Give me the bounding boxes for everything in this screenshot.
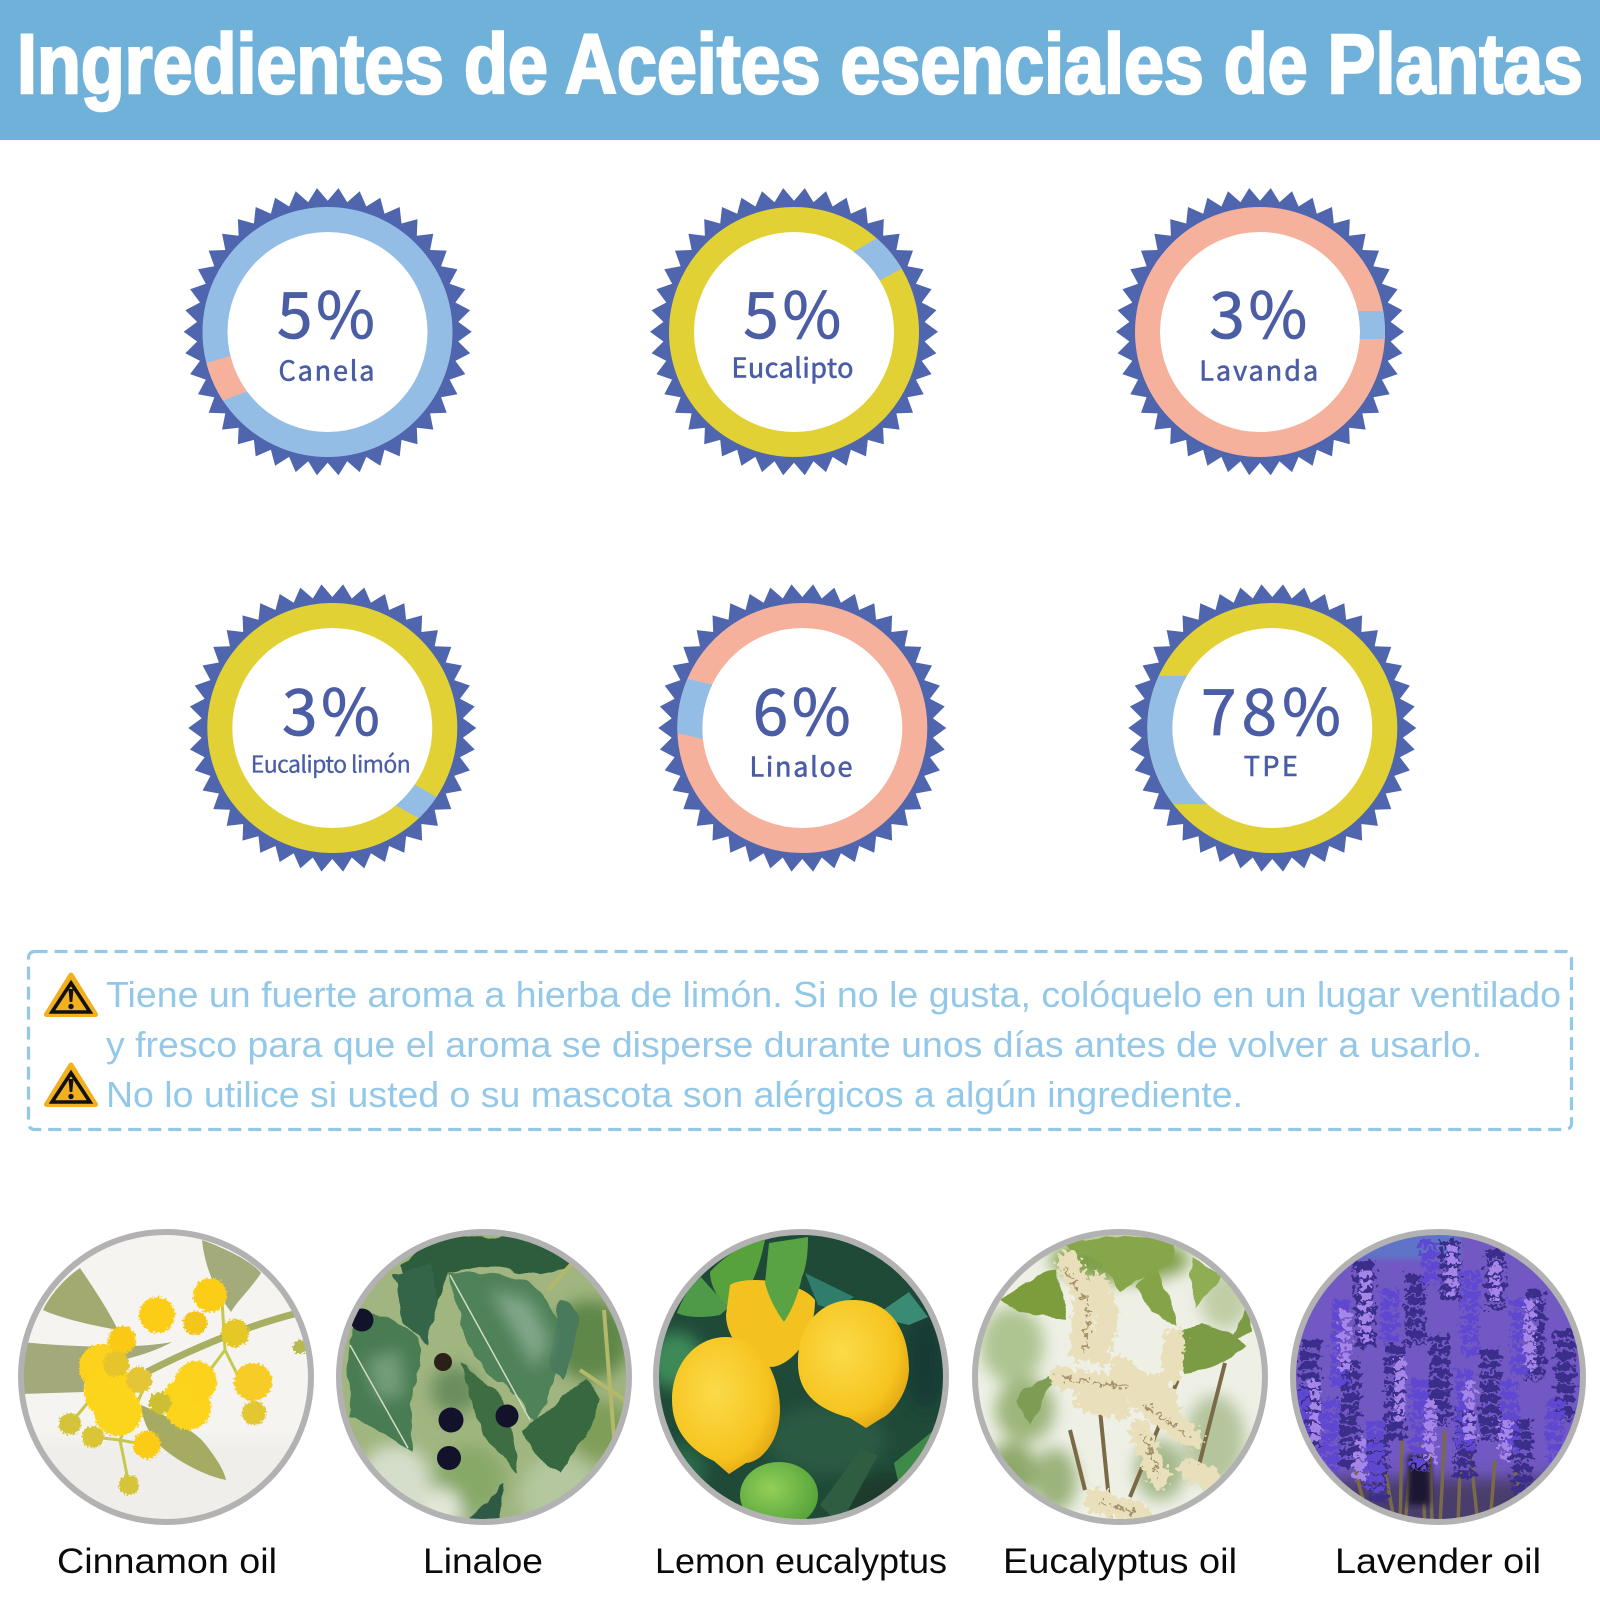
badge: 3% Eucalipto limón (188, 584, 476, 872)
badge: 5% Canela (184, 188, 472, 475)
label: Lemon eucalyptus: Lemon eucalyptus (655, 1542, 947, 1581)
label: Cinnamon oil: Cinnamon oil (57, 1542, 277, 1581)
badge: 5% Eucalipto: 5% (743, 265, 841, 357)
warning text: No lo utilice si usted o su mascota son alérgicos a algún ingrediente. (106, 1074, 1243, 1115)
icon: warning triangle 2 (46, 1065, 96, 1104)
badge: 3% Eucalipto limón: Eucalipto limón (251, 746, 411, 780)
title banner (0, 0, 1600, 140)
label: Eucalyptus oil: Eucalyptus oil (1003, 1542, 1237, 1581)
badge: 3% Eucalipto limón: 3% (282, 662, 380, 754)
photo: linaloe leaves and berries (334, 1227, 634, 1535)
icon: warning triangle 1 (46, 975, 96, 1014)
badge: 78% TPE: TPE (1244, 745, 1298, 784)
label: Lavender oil: Lavender oil (1335, 1542, 1541, 1581)
warning box (28, 952, 1572, 1130)
badge: 5% Eucalipto: Eucalipto (732, 346, 854, 385)
badge: 5% Canela: 5% (277, 265, 375, 357)
badge: 6% Linaloe (658, 584, 946, 872)
warning text: Tiene un fuerte aroma a hierba de limón. Si no le gusta, colóquelo en un lugar ventilado (106, 974, 1561, 1015)
warning text: y fresco para que el aroma se disperse durante unos días antes de volver a usarlo. (106, 1024, 1482, 1065)
badge: 78% TPE: 78% (1201, 662, 1341, 754)
badge: 5% Eucalipto (650, 188, 938, 475)
badge: 3% Lavanda: 3% (1209, 265, 1307, 357)
label: Linaloe: Linaloe (423, 1542, 543, 1581)
photo: eucalyptus flowers (970, 1227, 1270, 1527)
warning text (106, 974, 1561, 1115)
badge: 6% Linaloe: Linaloe (750, 746, 852, 785)
photo: cinnamon flowers (16, 1227, 316, 1530)
badge: 3% Lavanda (1116, 188, 1404, 475)
badge: 5% Canela: Canela (278, 350, 374, 389)
badge: 78% TPE (1128, 584, 1416, 872)
photo: lavender (1289, 1225, 1589, 1538)
badge: 3% Lavanda: Lavanda (1199, 350, 1318, 389)
badge: 6% Linaloe: 6% (753, 662, 851, 754)
photo: lemons (647, 1227, 951, 1528)
